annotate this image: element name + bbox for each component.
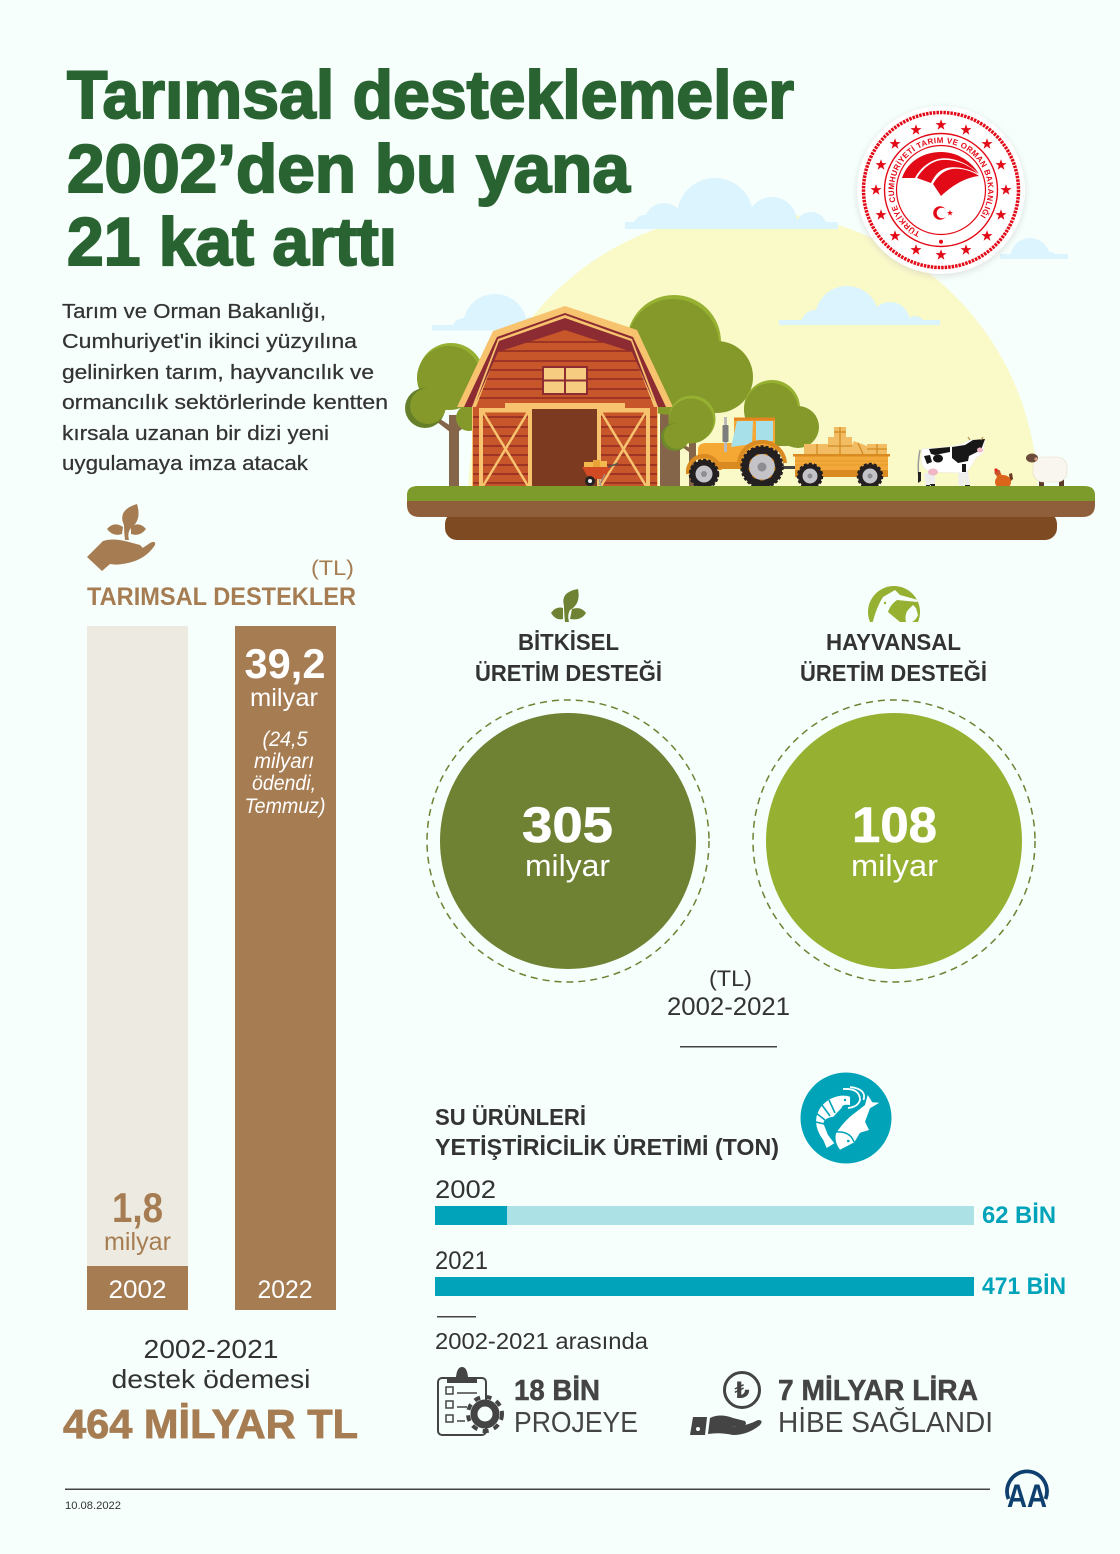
farm illustration (405, 178, 1095, 540)
panel: hayvansal üretim (753, 586, 1035, 982)
bar 2002: milyar (104, 1228, 171, 1256)
heading: TARIMSAL DESTEKLER (87, 583, 356, 611)
circle value: milyar (851, 848, 938, 883)
stat: 7 milyar: 7 MİLYAR LİRA (778, 1375, 978, 1407)
seal crescent (933, 206, 953, 244)
intro text: uygulamaya imza atacak (62, 452, 309, 475)
tree: right (744, 380, 819, 460)
tractor body (698, 420, 775, 468)
sun (468, 215, 1038, 486)
bar 2002 (87, 626, 188, 1310)
bar 2021: 2021 (435, 1247, 488, 1275)
intro text: Tarım ve Orman Bakanlığı, (62, 300, 326, 323)
icon: coin and hand: ₺ (734, 1378, 750, 1403)
seal stars (870, 119, 1012, 260)
cow (918, 437, 985, 490)
tree: left (405, 343, 484, 486)
stat: 18 bin: 18 BİN (514, 1375, 600, 1407)
trailer (795, 456, 888, 477)
icon: fish (800, 1072, 892, 1164)
panel: tarımsal destekler (63, 504, 358, 1447)
ground (407, 486, 1095, 540)
tractor wheels (690, 446, 782, 488)
icon: hand with plant (87, 504, 155, 571)
bar 2002 (435, 1176, 1056, 1229)
unit label: (TL) (311, 557, 354, 580)
tree: small front (661, 396, 716, 486)
title: 2002’den bu yana (67, 131, 631, 207)
total label: destek ödemesi (112, 1364, 310, 1394)
sheep (1026, 454, 1067, 488)
intro text: kırsala uzanan bir dizi yeni (62, 422, 329, 445)
chicken (994, 468, 1013, 492)
logo: AA: AA (1007, 1478, 1047, 1514)
barn window (542, 366, 588, 395)
stat: 18 bin (514, 1375, 638, 1439)
intro text: ormancılık sektörlerinde kentten (62, 391, 388, 414)
bar 2022: milyar (250, 684, 318, 712)
circle value (427, 700, 709, 982)
period caption (667, 966, 790, 1021)
intro text: gelinirken tarım, hayvancılık ve (62, 361, 374, 384)
title: 21 kat arttı (67, 204, 397, 280)
icon: animals (868, 586, 920, 622)
heading (475, 629, 662, 686)
hay bales (804, 427, 887, 454)
wheelbarrow (582, 460, 618, 486)
stat: 18 bin: PROJEYE (514, 1407, 638, 1439)
heading: HAYVANSAL (826, 629, 961, 655)
heading: YETİŞTİRİCİLİK ÜRETİMİ (TON) (435, 1134, 779, 1160)
intro text: Cumhuriyet'in ikinci yüzyılına (62, 330, 358, 353)
tree: big back (627, 295, 753, 486)
intro text (62, 300, 388, 475)
circle value: milyar (525, 848, 610, 883)
period label: 2002-2021 arasında (435, 1328, 648, 1354)
heading (800, 629, 987, 686)
bar 2022: milyarı (254, 750, 314, 773)
period caption: 2002-2021 (667, 993, 790, 1021)
bar 2022 (235, 626, 336, 1310)
bar 2002: 1,8 (112, 1184, 163, 1231)
icon: checklist with gear (438, 1367, 502, 1435)
stat: 7 milyar: HİBE SAĞLANDI (778, 1406, 993, 1439)
date: 10.08.2022 (65, 1500, 121, 1512)
heading: ÜRETİM DESTEĞİ (475, 659, 662, 686)
bar 2022: ödendi, (252, 772, 316, 795)
seal text: TÜRKİYE CUMHURİYETİ TARIM VE ORMAN BAKANLIĞI (888, 137, 994, 237)
circle value (753, 700, 1035, 982)
tractor with trailer (688, 417, 890, 488)
bar 2002: 2002 (435, 1176, 496, 1204)
footer (65, 1471, 1047, 1514)
bar 2021: 471 BİN (982, 1273, 1066, 1300)
heading: BİTKİSEL (518, 629, 619, 655)
heading: SU ÜRÜNLERİ (435, 1104, 586, 1130)
stat: 7 milyar (778, 1375, 993, 1439)
panel: su ürünleri (435, 1072, 1066, 1439)
bar 2002: 2002 (108, 1276, 166, 1304)
icon: leaves (551, 589, 586, 622)
barn door (532, 408, 597, 486)
title: Tarımsal desteklemeler (67, 57, 794, 133)
circle value: 305 (522, 797, 613, 853)
title (67, 57, 794, 280)
bar 2022: Temmuz) (244, 795, 326, 818)
heading (435, 1104, 779, 1160)
icon: coin and hand (690, 1372, 762, 1435)
ministry seal (855, 106, 1027, 278)
bar 2002: 62 BİN (982, 1202, 1056, 1229)
heading: ÜRETİM DESTEĞİ (800, 659, 987, 686)
barn side panels (479, 408, 650, 486)
clouds (432, 178, 1068, 358)
total label: 2002-2021 (144, 1334, 278, 1364)
bar 2022: 2022 (258, 1276, 312, 1304)
seal emblem (902, 152, 979, 196)
panel: bitkisel üretim (427, 589, 709, 982)
bar 2021 (435, 1247, 1066, 1300)
bar 2022: (24,5 (262, 728, 308, 751)
bar 2022: 39,2 (244, 640, 326, 687)
barn (457, 306, 673, 486)
period caption: (TL) (709, 966, 752, 991)
total label (112, 1334, 310, 1394)
circle value: 108 (852, 797, 937, 853)
total value: 464 MİLYAR TL (63, 1401, 358, 1447)
